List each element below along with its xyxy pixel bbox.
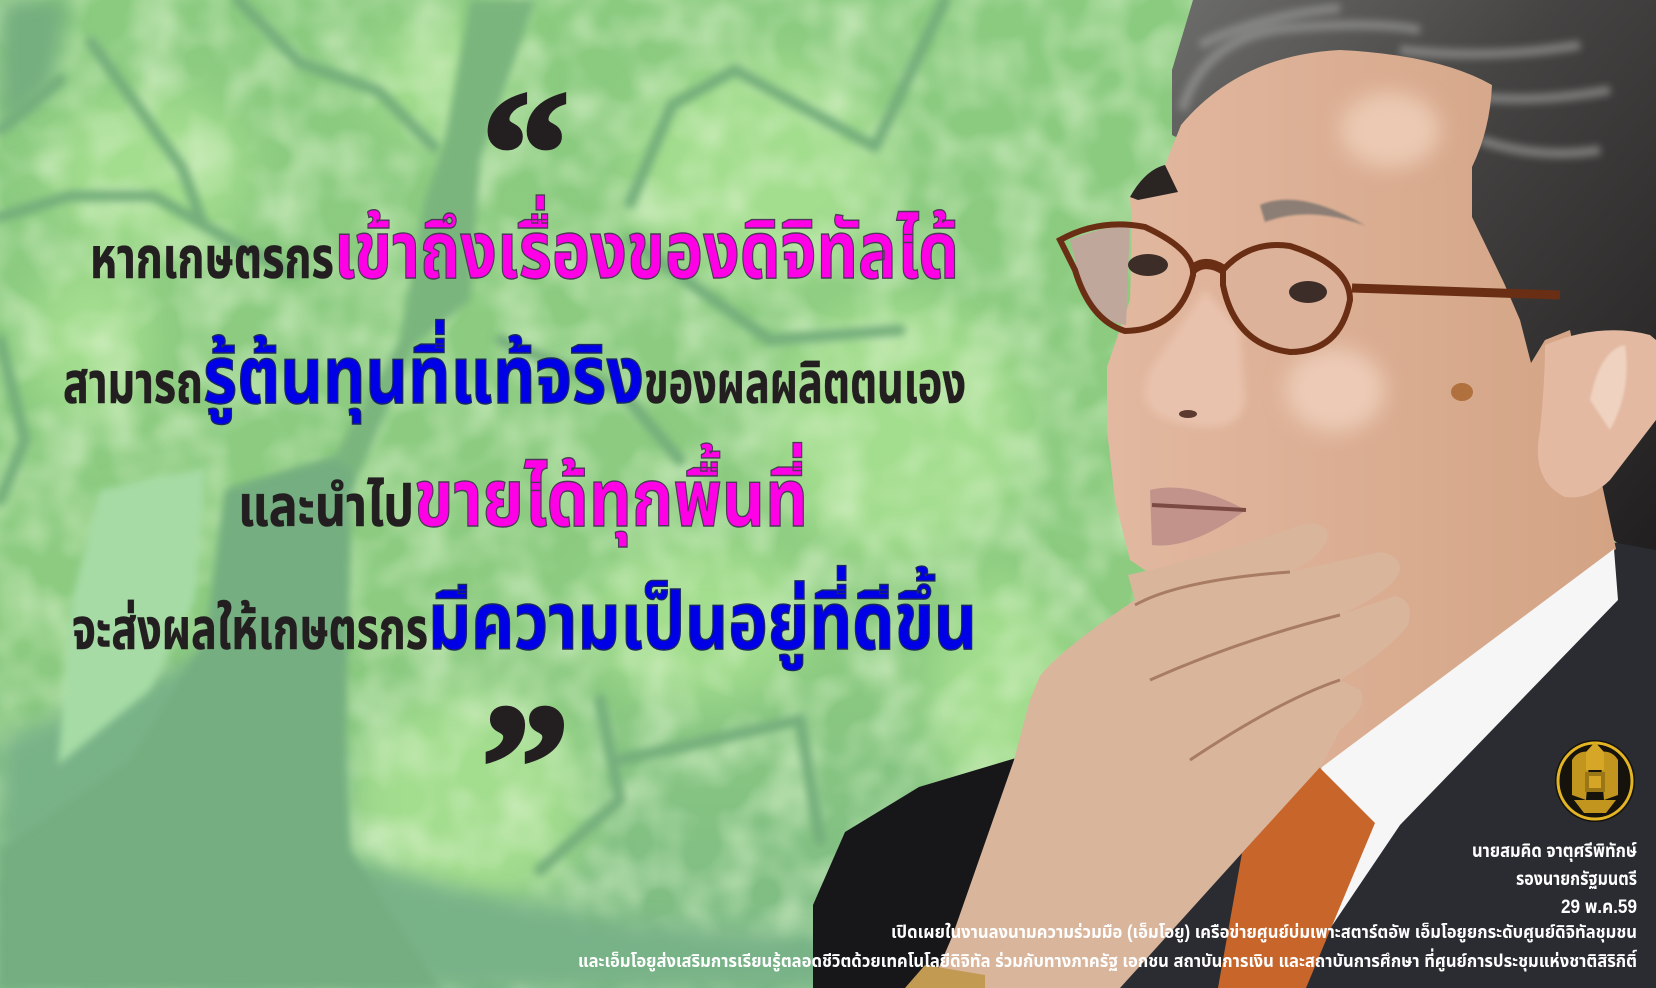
finger creases [1135, 572, 1340, 760]
glasses [1060, 224, 1560, 352]
tree trunk upper [225, 0, 535, 490]
line 3: ขายได้ทุกพื้นที่ [414, 443, 808, 547]
source caption [578, 922, 1638, 972]
line 3: และนำไป [238, 474, 414, 539]
emblem: government seal [1555, 740, 1635, 822]
face and neck [1107, 50, 1616, 810]
forehead highlight [1340, 92, 1440, 168]
line 2: รู้ต้นทุนที่แท้จริง [203, 320, 644, 424]
ear inner [1590, 345, 1627, 430]
line 1: เข้าถึงเรื่องของดิจิทัลได้ [334, 195, 959, 295]
hand [930, 524, 1410, 988]
quote mark: closing: ” [481, 667, 570, 865]
mouth line [1152, 505, 1246, 510]
line 4: มีความเป็นอยู่ที่ดีขึ้น [428, 566, 977, 670]
light patch in the canopy [58, 468, 205, 765]
speaker credit: รองนายกรัฐมนตรี [1516, 869, 1637, 890]
shirt collar [1270, 549, 1618, 988]
speaker credit: 29 พ.ค.59 [1561, 897, 1637, 918]
tie [1218, 767, 1375, 988]
speaker credit [1472, 841, 1637, 918]
branches [0, 0, 945, 870]
jacket [1100, 540, 1656, 988]
quote mark: opening: “ [481, 54, 570, 252]
cheek highlight [1285, 348, 1385, 432]
line 2: ของผลผลิตตนเอง [644, 351, 966, 416]
nose [1144, 290, 1245, 427]
line 2 [63, 320, 966, 424]
eyebrows [1130, 165, 1178, 200]
lips [1150, 488, 1246, 546]
line 2: สามารถ [63, 351, 203, 416]
line 4 [72, 566, 977, 670]
hair [1172, 0, 1656, 580]
line 3 [238, 443, 808, 547]
watch [905, 965, 985, 988]
mole [1451, 383, 1473, 401]
nostril [1179, 410, 1197, 418]
tree trunk lower [0, 460, 440, 988]
sleeve [813, 758, 1130, 988]
portrait: man with glasses and hand on chin [813, 0, 1656, 988]
right eyebrow [1260, 200, 1366, 226]
line 1: หากเกษตรกร [90, 226, 334, 291]
line 4: จะส่งผลให้เกษตรกร [72, 597, 428, 662]
ear [1538, 330, 1656, 497]
hair grey streaks [1182, 8, 1610, 153]
line 1 [90, 195, 959, 295]
